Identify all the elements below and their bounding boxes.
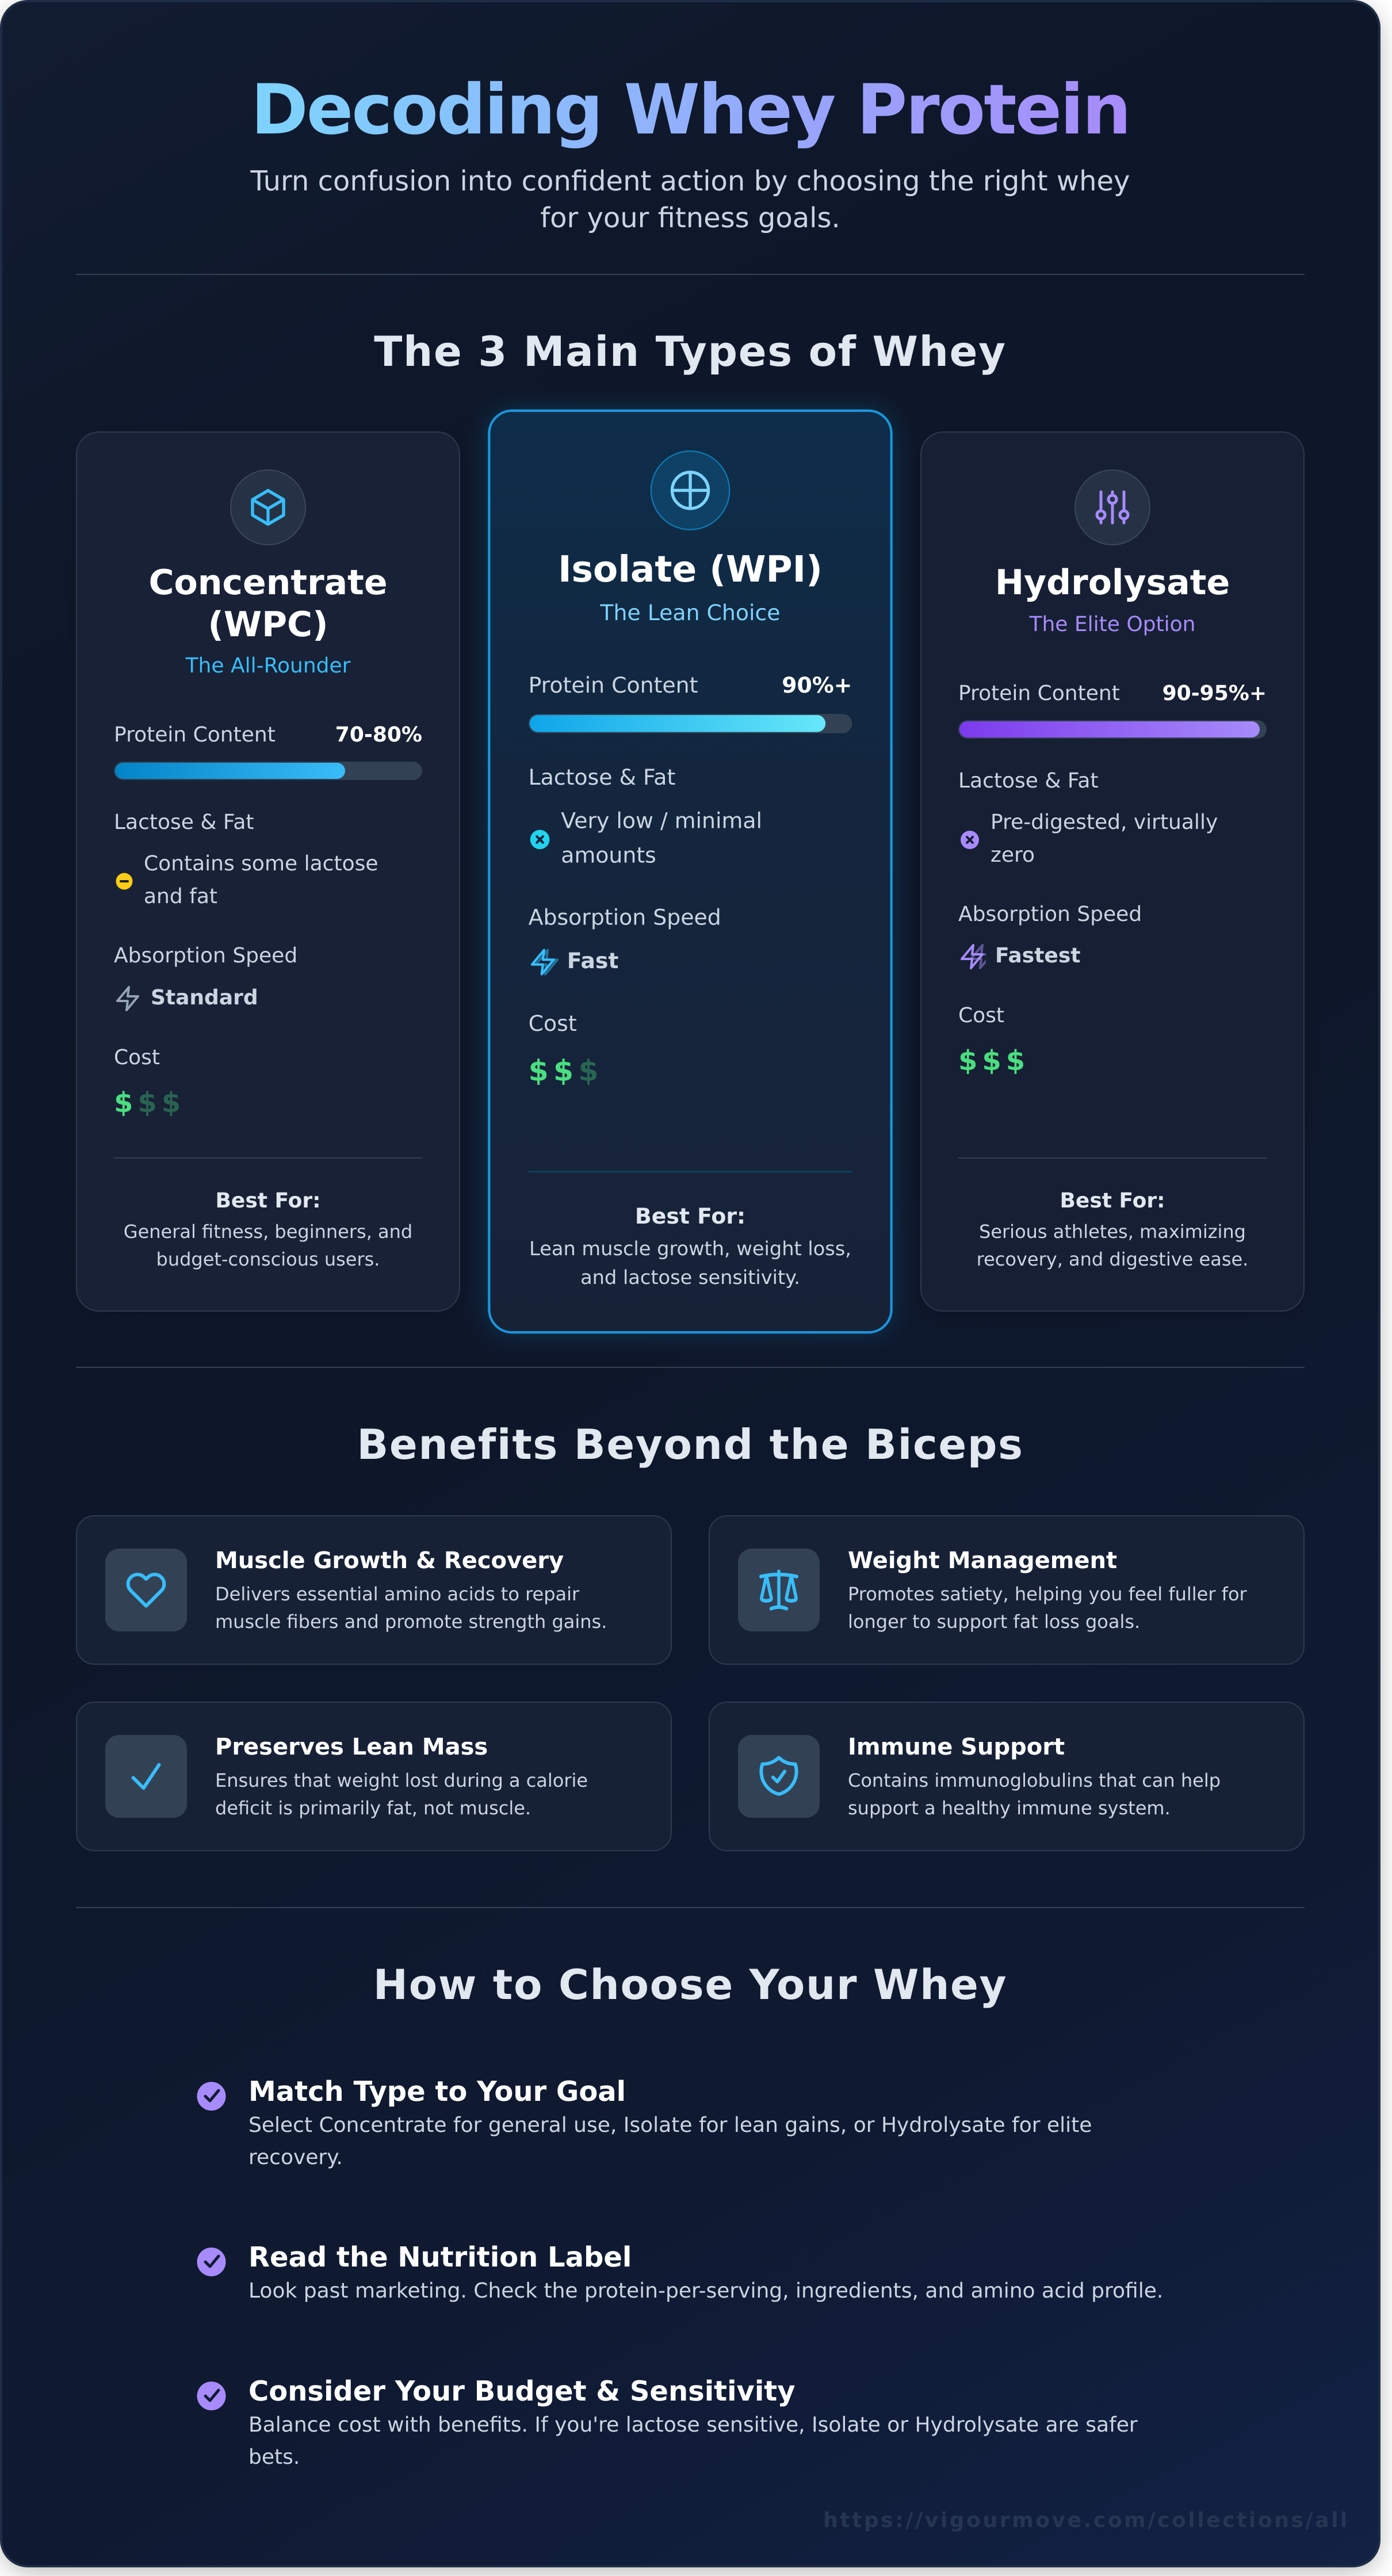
metric: cost: $	[579, 1054, 599, 1088]
metric: lactose and fat: Lactose & Fat	[958, 769, 1099, 793]
metric: cost: $	[553, 1054, 573, 1088]
metric: absorption speed: Standard	[151, 986, 258, 1010]
metric: cost: $	[958, 1045, 977, 1077]
best for: recovery, and digestive ease.	[977, 1248, 1248, 1270]
metric: absorption speed	[114, 944, 297, 1010]
step: match type: recovery.	[248, 2146, 343, 2169]
metric: cost	[114, 1046, 181, 1119]
step: match type: Select Concentrate for general use, Isolate for lean gains, or Hydrolysate for elite	[248, 2113, 1092, 2137]
icon: cube	[231, 470, 305, 545]
benefit: weight management	[709, 1516, 1304, 1664]
metric: cost: Cost	[958, 1004, 1004, 1027]
best for: General fitness, beginners, and	[124, 1221, 412, 1243]
metric: cost: Cost	[529, 1012, 577, 1037]
metric: absorption speed: Fast	[567, 949, 618, 973]
title: Decoding Whey Protein	[251, 70, 1130, 150]
step: budget	[197, 2375, 1138, 2469]
best for	[124, 1189, 412, 1270]
metric: cost: $	[114, 1087, 133, 1119]
metric: absorption speed	[529, 905, 721, 974]
best for	[529, 1205, 851, 1289]
heading: benefits: Benefits Beyond the Biceps	[357, 1420, 1024, 1469]
metric: cost: $	[982, 1045, 1001, 1077]
heading: how to choose: How to Choose Your Whey	[373, 1960, 1007, 2009]
subtitle: Turn confusion into confident action by choosing the right whey	[250, 165, 1130, 197]
metric: absorption speed: Fastest	[995, 944, 1080, 968]
benefit: muscle growth: muscle fibers and promote strength gains.	[215, 1611, 607, 1633]
card tagline: The Elite Option	[1028, 613, 1196, 636]
metric: cost: $	[162, 1087, 181, 1119]
step: match type: Match Type to Your Goal	[248, 2076, 626, 2108]
metric: protein content: 70-80%	[335, 723, 422, 747]
metric: protein content: 90-95%+	[1162, 682, 1267, 705]
metric: absorption speed: Absorption Speed	[114, 944, 297, 968]
card glow: isolate	[488, 410, 893, 1333]
panel: isolate card	[489, 411, 892, 1332]
metric: cost: $	[137, 1087, 157, 1119]
best for	[977, 1189, 1248, 1270]
icon: circle cross	[651, 451, 729, 530]
benefit: immune support	[709, 1702, 1304, 1851]
metric: protein content: Protein Content	[114, 723, 276, 747]
step: budget: bets.	[248, 2445, 300, 2469]
metric: cost: Cost	[114, 1046, 160, 1069]
panel: hydrolysate card	[921, 432, 1304, 1311]
step: read label: Look past marketing. Check the protein-per-serving, ingredients, and amino acid profile.	[248, 2279, 1163, 2303]
best for: budget-conscious users.	[156, 1248, 380, 1270]
best for: Best For:	[1060, 1189, 1165, 1213]
metric: lactose and fat	[114, 811, 378, 908]
step: budget: Consider Your Budget & Sensitivity	[248, 2375, 796, 2407]
step: match type	[197, 2076, 1092, 2169]
benefit: lean mass	[77, 1702, 671, 1851]
metric: protein content	[114, 723, 422, 780]
benefit: muscle growth: Muscle Growth & Recovery	[215, 1547, 564, 1574]
card title: Hydrolysate	[995, 563, 1230, 603]
metric: lactose and fat	[529, 765, 762, 868]
metric: cost: $	[529, 1054, 549, 1088]
icon: check badge	[197, 2082, 225, 2111]
card title: Isolate (WPI)	[558, 548, 823, 591]
benefit: lean mass: Preserves Lean Mass	[215, 1734, 488, 1760]
metric: lactose and fat: amounts	[561, 843, 656, 868]
benefit: weight management: Promotes satiety, helping you feel fuller for	[848, 1583, 1248, 1605]
metric: absorption speed: Absorption Speed	[958, 903, 1142, 926]
best for: Best For:	[215, 1189, 321, 1213]
card shadow: concentrate	[78, 436, 458, 1314]
metric: protein content	[529, 674, 852, 733]
metric: cost	[529, 1012, 599, 1088]
metric: protein content: Protein Content	[958, 682, 1120, 705]
icon: shield check	[761, 1757, 797, 1794]
metric: lactose and fat: Contains some lactose	[144, 852, 378, 876]
metric: lactose and fat: Pre-digested, virtually	[991, 811, 1218, 834]
metric: protein content: 90%+	[782, 674, 852, 698]
best for: Serious athletes, maximizing	[979, 1221, 1246, 1243]
metric: lactose and fat: Lactose & Fat	[114, 811, 254, 834]
benefit: weight management: Weight Management	[848, 1547, 1117, 1574]
benefit: immune support: Immune Support	[848, 1734, 1065, 1760]
icon: check badge	[197, 2382, 225, 2410]
metric: lactose and fat: and fat	[144, 885, 217, 908]
benefit: lean mass: Ensures that weight lost during a calorie	[215, 1769, 588, 1791]
benefit: lean mass: deficit is primarily fat, not muscle.	[215, 1797, 531, 1819]
card tagline: The All-Rounder	[185, 654, 351, 678]
step: read label	[197, 2241, 1163, 2303]
best for: Lean muscle growth, weight loss,	[529, 1237, 851, 1260]
benefit: muscle growth	[77, 1516, 671, 1664]
icon: heart	[128, 1574, 164, 1606]
metric: absorption speed	[958, 903, 1142, 968]
metric: lactose and fat: zero	[991, 843, 1035, 867]
benefit: immune support: Contains immunoglobulins that can help	[848, 1769, 1221, 1791]
icon: check badge	[197, 2248, 225, 2276]
panel: concentrate card	[77, 432, 460, 1311]
heading: types: The 3 Main Types of Whey	[374, 327, 1007, 376]
step: budget: Balance cost with benefits. If you're lactose sensitive, Isolate or Hydrolysate are safer	[248, 2413, 1138, 2437]
benefit: muscle growth: Delivers essential amino acids to repair	[215, 1583, 580, 1605]
metric: absorption speed: Absorption Speed	[529, 905, 721, 930]
icon: scale	[761, 1572, 797, 1608]
subtitle: for your fitness goals.	[540, 202, 840, 234]
metric: cost: $	[1006, 1045, 1025, 1077]
metric: lactose and fat: Lactose & Fat	[529, 765, 675, 790]
best for: and lactose sensitivity.	[580, 1266, 800, 1289]
benefit: immune support: support a healthy immune system.	[848, 1797, 1171, 1819]
icon: check	[133, 1765, 159, 1788]
metric: lactose and fat	[958, 769, 1218, 867]
metric: protein content: Protein Content	[529, 674, 698, 698]
watermark: https://vigourmove.com/collections/all	[823, 2509, 1349, 2532]
best for: Best For:	[635, 1205, 745, 1229]
card title: Concentrate	[148, 563, 388, 603]
card tagline: The Lean Choice	[599, 601, 781, 626]
card title: (WPC)	[208, 605, 328, 645]
metric: cost	[958, 1004, 1025, 1077]
benefit: weight management: longer to support fat loss goals.	[848, 1611, 1140, 1633]
metric: protein content	[958, 682, 1267, 739]
icon: sliders	[1075, 470, 1150, 545]
metric: lactose and fat: Very low / minimal	[561, 809, 762, 834]
card shadow: hydrolysate	[923, 436, 1302, 1314]
step: read label: Read the Nutrition Label	[248, 2241, 632, 2273]
